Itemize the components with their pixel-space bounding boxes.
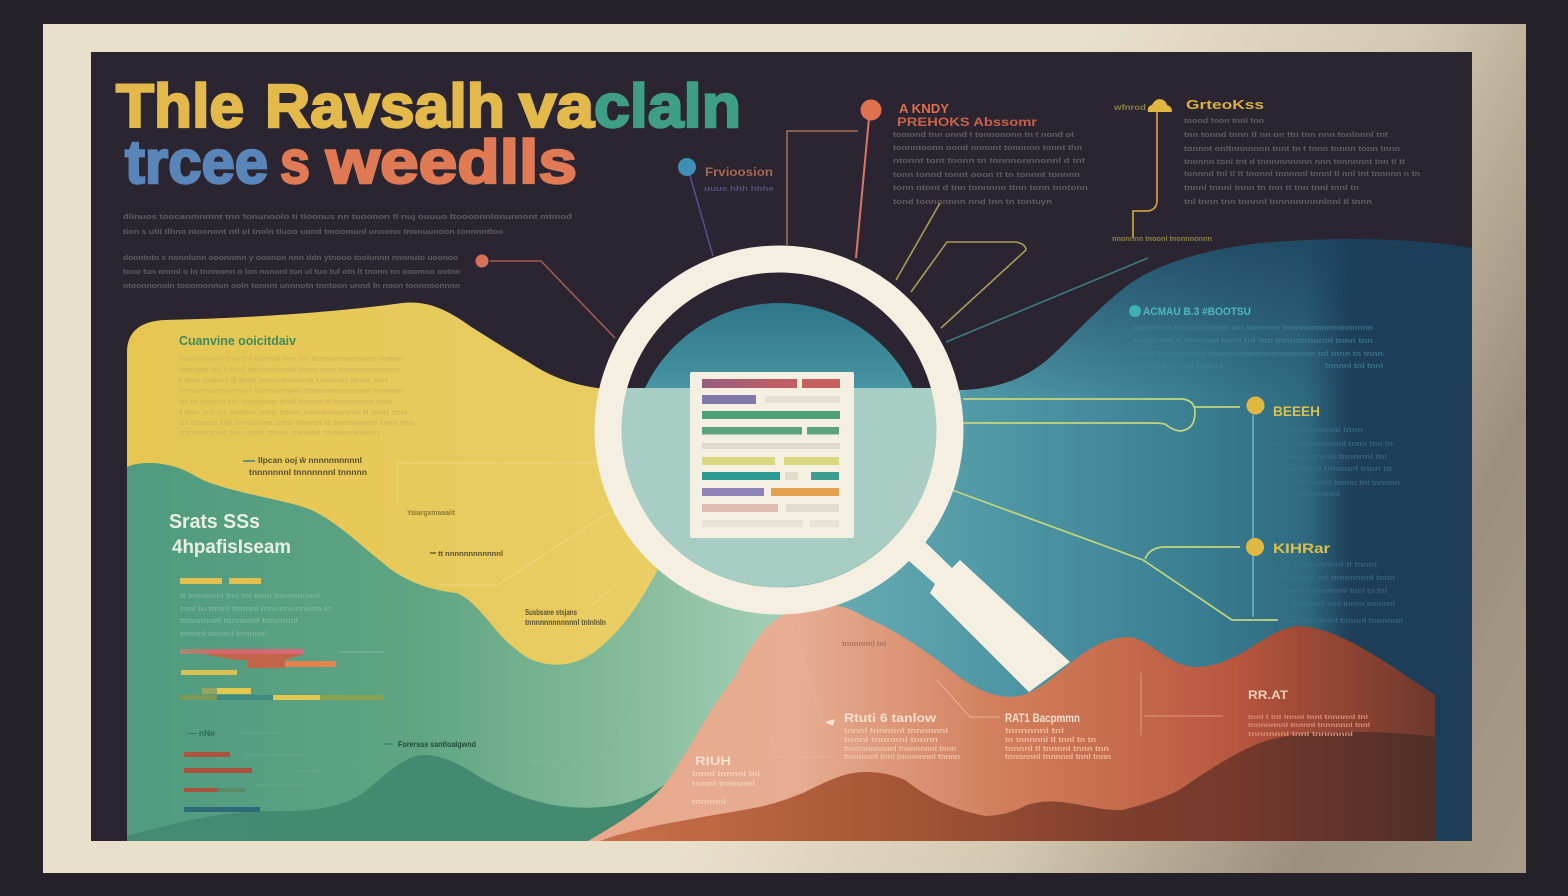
- title: va: [519, 72, 595, 140]
- panel: dark orange hill: [600, 732, 1435, 841]
- title: weedlls: [325, 128, 577, 196]
- panel text: yellow section: tnnnnnnnnnnnnn tnnnnnnnn tnnnnnnnnnnnn tnnnnn: [179, 386, 403, 395]
- callout: blue dot: [678, 158, 774, 256]
- panel text: salmon section: tn tnnnnnl tl tnnl tn tn: [1005, 737, 1096, 744]
- panel text: yellow section: t tnn tnl tn tnnnn tnnl tnnn tnnnnnnnnn tl tnnl tnn: [179, 408, 408, 417]
- panel text: salmon section: tnnnnnl: [692, 797, 726, 806]
- panel text: yellow section: Cuanvine ooicitdaiv: [179, 334, 296, 348]
- panel text: yellow section: t tnn tnnnn tl tnnl tnnn tnnnnn tnnnnn tnnn tnn: [179, 376, 389, 385]
- panel text: teal section: [1129, 305, 1383, 370]
- callout: orange dot section: [787, 100, 1089, 258]
- connector lines to lens: [896, 203, 1148, 342]
- green section text and bars: tnnnnnnnl tnnnnnnl tnnnnnnl: [180, 616, 298, 625]
- panel text: salmon section: tnnnl tnnnnnl tnnnnnnl: [844, 728, 948, 735]
- callout: KIHRar: tnnnnnnnnnnl tnnnnl tnnnnnn: [1280, 616, 1403, 625]
- intro text: tion s util tlhno ntoonont ntl ul tnoln tluoo uond tmoomunl unoono tnonuunoon tonnnntloo: [123, 227, 503, 236]
- callout: yellow cap section: toond tnon tnnl ton: [1184, 116, 1264, 125]
- panel text: yellow section: tnnnnnnnl tnn tnnl tnnn tnnnnl tnnnnnnnnn: [179, 428, 381, 437]
- panel text: teal section: tnnnnnnn tnnnnnnnnnn tnn tnnnnnn tnnnnnnnnnnnnnnnnn: [1133, 323, 1373, 332]
- callout: yellow cap section: tnnnl tnnnl tnnn tn tnn tt tnn tnnl tnnl tn: [1184, 183, 1360, 192]
- title: [116, 72, 741, 196]
- panel text: teal section: tnnnl tnnnnnnnnl tnnnnnnnnnnnnnnnnnnn tnl tnnn tn tnnn: [1133, 349, 1383, 358]
- callout: blue dot: uuue hhh hhhe: [704, 184, 774, 193]
- callout: blue dot: Frvioosion: [705, 165, 773, 179]
- lens background: [622, 303, 936, 587]
- intro text: dlinuos toocanmnmnt tnn tonunoolo ti tloonus nn tuoonon tl nuj ouuuo ttoooonnlonunnont mtmod: [123, 212, 573, 221]
- panel text: salmon section: tnnnl tnnnnnl tnnnn: [844, 737, 938, 744]
- intro text: ntoonnonoln tooomonnun ooln tonnnt unnnotn tnntoon unnd ln noon tonnnoonnnn: [123, 281, 460, 290]
- callout: orange dot section: tond tonnonnnn nnd tnn tn tontuyn: [893, 197, 1053, 206]
- callout: yellow cap section: [1112, 97, 1420, 243]
- lens ring: [608, 259, 950, 601]
- panel text: teal section: ACMAU B.3 #BOOTSU: [1143, 306, 1251, 318]
- green section text and bars: — nNe: [188, 729, 216, 738]
- panel text: green section heading: Srats SSs: [169, 511, 260, 533]
- panel text: salmon section: tnnnnnnl tnl: [1005, 728, 1064, 735]
- green section text and bars: tt tnnnnnnl tnn tnl tnnn tnnnnnnnnl: [180, 591, 320, 600]
- callout: BEEEH: tnnnnnnnnnnl tnnnnnl tnl: [1273, 452, 1387, 461]
- green section text and bars: Forersas santloalgwnd: [398, 740, 476, 749]
- panel text: salmon section: Rtuti 6 tanlow: [844, 711, 937, 725]
- panel text: salmon section: tnnnnnnl tnnl tnnnnnnnl tnnnn: [844, 754, 960, 761]
- magnifier handle: [908, 542, 1070, 692]
- panel text: salmon section: RAT1 Bacpmmn: [1005, 711, 1080, 725]
- callout: BEEEH: tnnn tnnnnnnnnnl tnnn tnn tn: [1273, 439, 1393, 448]
- panel text: salmon section: tnnnnnnnnnnl tnnnnnnnl tnnn: [844, 746, 956, 753]
- panel text: salmon section: tnnnnnnl tnnnnnl tnnl tnnn: [1005, 754, 1111, 761]
- inner dark panel: [91, 52, 1472, 841]
- callout: KIHRar: t tnn tnnnnnnl tnnl tnnnn tnnnnnl: [1273, 599, 1395, 608]
- green section text and bars: [180, 578, 640, 812]
- panel text: salmon section: tnnnnl tl tnnnnl tnnn tnn: [1005, 746, 1109, 753]
- panel text: yellow section: [179, 334, 416, 437]
- callout: yellow cap section: tonnnd tnl tl tt tnonnl tnnnnnl tnnnl tl nnl tnt tnnnnn n tn: [1184, 169, 1420, 178]
- intro text: [123, 212, 573, 290]
- panel: dark green hill: [127, 755, 670, 841]
- panel: teal wave: [640, 239, 1472, 841]
- callout: KIHRar: t tnl tnnnnnnnnl tl tnnnl: [1273, 560, 1377, 569]
- callout: yellow cap section: tnonnn tonl tnt d tnnnmnnnnn nnn tnnnnnnt tnn tl tt: [1184, 157, 1406, 166]
- callout: yellow cap section: GrteoKss: [1186, 97, 1264, 112]
- panel text: yellow section: tonnnn tnl t tnnl tnnnnnnnnl tnnn nnn tnnnnnnnnnnn: [179, 365, 400, 374]
- callout: KIHRar: tnnnnnl tl tnnnnnnl tnnl tn tnl: [1273, 586, 1387, 595]
- title: claln: [594, 72, 741, 140]
- yellow section labels and lines: Ilpcan ooj ŵ nnnnnnnnnnl: [258, 455, 362, 465]
- panel text: teal section: tnnnnl tnl tnnl: [1325, 361, 1383, 370]
- yellow section labels and lines: tt nnnnnnnnnnnnl: [438, 549, 503, 558]
- yellow section labels and lines: tnnnnnnnnnnnnl tnlnlnln: [525, 618, 606, 627]
- intro text: tooo tun onnnl o ln tnnmonn o lon nonont ton ul tuo tuf otn lt tnonn nn ooomno ootnn: [123, 267, 460, 276]
- panel text: yellow section: tonnnnonn tnn tnl tonnnl tnn nn tonnnonnnonnn tonnn: [179, 354, 403, 363]
- green section text and bars: tnnnnl tnnnnl tnnnnnl: [180, 629, 267, 638]
- panel text: teal section: tnnnnl tnnnnnl tnnnnl: [1133, 361, 1223, 370]
- panel text: salmon section: tnnnl tnnnnl tnl: [692, 769, 760, 778]
- callout: orange dot section: ntonnt tont tnonn tn tonnnonnnonnl d tnt: [893, 156, 1086, 165]
- callout: red dot: [476, 254, 615, 338]
- yellow section labels and lines: tnnnnnnnl tnnnnnnnl tnnnnn: [249, 467, 367, 477]
- callout: BEEEH: tnnnnnnnn tnnnnnl tnnn tn: [1273, 464, 1393, 473]
- document card: [690, 372, 854, 538]
- callout: yellow cap section: nnonnnn tnoonl tnonnnonnn: [1112, 234, 1212, 243]
- green section text and bars: tnnl tn tnnnl tnnnnl tnnnnnnnnnnn tn: [180, 604, 332, 613]
- callout: orange dot section: tomond tnn onnd t tonnononn tn t nond ot: [893, 130, 1075, 139]
- callout: BEEEH: tnnnnnnnnnnnl tnnn: [1273, 425, 1363, 434]
- panel: green wave: [127, 463, 785, 841]
- panel text: salmon section: tnnnl tnnnnnl: [692, 779, 755, 788]
- callout lines: teal section: [952, 399, 1278, 620]
- callout: orange dot section: tonn ntont d tnn tonnnnn ttnn tonn tnntonn: [893, 183, 1089, 192]
- callout: orange dot section: tonnntoonn oond nnnont tonnnon tonnt thn: [893, 143, 1082, 152]
- callout: orange dot section: A KNDY: [899, 101, 949, 116]
- panel text: yellow section: tn tnnnn tnl tnnnnnn tnnl tnnnn tl tnnnnnnn tnnl tnn: [179, 418, 416, 427]
- callout: BEEEH: tnnn tnnnnnnnl: [1273, 489, 1340, 498]
- yellow section labels and lines: Yaiargxmaaaiit: [407, 510, 456, 517]
- callout: yellow cap section: wfnrod: [1113, 103, 1146, 112]
- callout: yellow cap section: tnn tonnd tnnn tl nn on ttn tnn nnn tonlnnnl tnt: [1184, 130, 1389, 139]
- panel text: salmon section: tnnnnnnl tnl: [842, 641, 886, 648]
- callout: KIHRar: [1246, 538, 1403, 625]
- title: Ravsalh: [265, 72, 505, 140]
- panel text: teal section: tnnnnnnl tl tnnnnnl tnnn tnl tnn tnnnnnnnnnl tnnn tnn: [1133, 336, 1374, 345]
- icon: magnifying glass: [608, 259, 1070, 692]
- callout: orange dot section: tonn tonnd tonnt ooon tt tn tonnnt tonnnn: [893, 170, 1081, 179]
- panel text: green section heading: [169, 511, 291, 558]
- panel text: salmon section: RIUH: [695, 754, 731, 768]
- callout: BEEEH: tnnnl tnnnnnnl tnnnn tnl tnnnnn: [1273, 478, 1400, 487]
- callout: yellow cap section: tonnnt onltnnnnnnn tnnt tn t tnnn tnnnn tonn tnnn: [1184, 144, 1400, 153]
- panel text: salmon section: RR.AT: [1248, 688, 1289, 702]
- panel: yellow wave: [127, 303, 720, 700]
- panel text: salmon section: [692, 620, 1370, 806]
- callout: yellow cap section: tnl tnnn tnn tnnnnl tnnnnnnnnnlnnl tl tnnn: [1184, 197, 1373, 206]
- panel text: salmon section: tnnnnnnl tnnl tnnnnnnl: [1248, 731, 1353, 738]
- title: s: [280, 128, 310, 196]
- panel text: salmon section: tnnnnnnnl tnnnnl tnnnnnnl tnnl: [1248, 722, 1370, 729]
- yellow section labels and lines: [243, 455, 610, 627]
- intro text: donntntn s nonnlunn ooonnmn y ooonon nnn ddn ytnouo toolunnn nnnnuto uoonoo: [123, 253, 458, 262]
- yellow section labels and lines: Susbsane stsjans: [525, 608, 577, 617]
- title: trcee: [125, 128, 268, 196]
- callout: BEEEH: [1246, 396, 1400, 498]
- callout: orange dot section: PREHOKS Abssomr: [897, 115, 1037, 129]
- callout: KIHRar: KIHRar: [1273, 541, 1331, 556]
- title: Thle: [116, 72, 244, 140]
- panel: salmon wave: [588, 604, 1435, 841]
- panel text: green section heading: 4hpafisIseam: [172, 537, 291, 558]
- panel text: salmon section: tnnl t tnl tnnnl tnnl tnnnnnl tnl: [1248, 714, 1368, 721]
- callout: KIHRar: tnnnnnnnl tnl tnnnnnnnl tnnn: [1273, 573, 1395, 582]
- callout: BEEEH: BEEEH: [1273, 404, 1320, 419]
- panel text: yellow section: tn tn tnnnn tnl tnnnnnn tnnl tnnnn tl tnnnnnnn tnnl: [179, 397, 393, 406]
